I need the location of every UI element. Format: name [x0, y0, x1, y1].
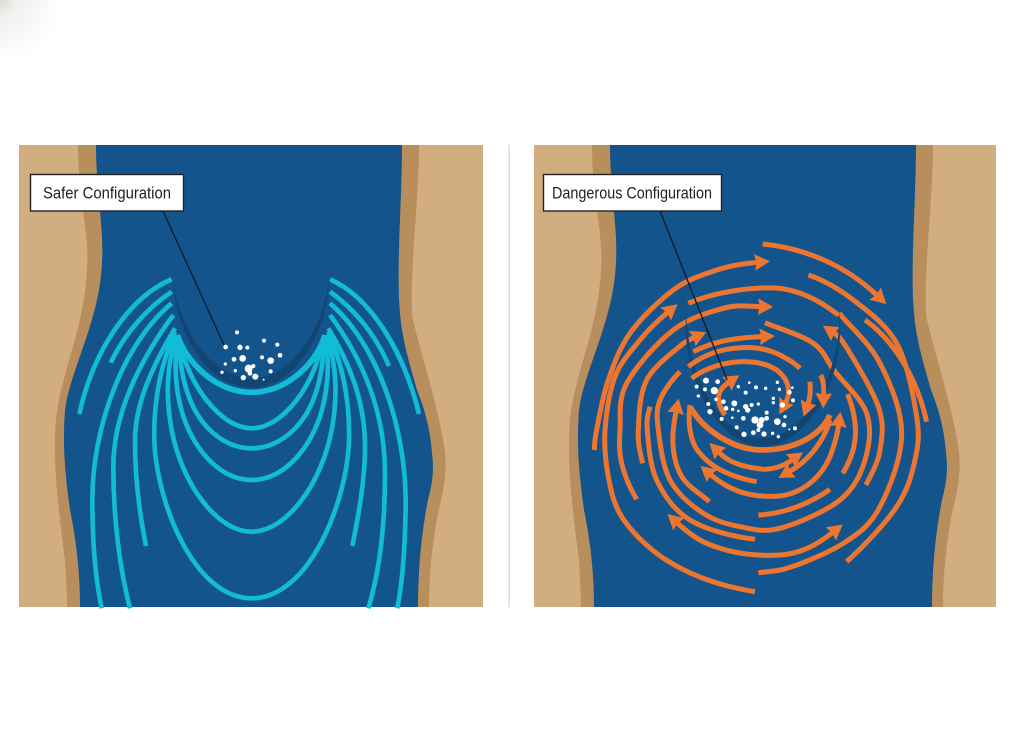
panel: safer configuration — [19, 145, 483, 608]
sediment wall — [19, 145, 483, 607]
water channel — [578, 145, 947, 607]
panel: dangerous configuration — [534, 145, 996, 607]
label: dangerous configuration: Dangerous Configuration — [552, 184, 712, 202]
divider — [508, 145, 510, 607]
label: dangerous configuration — [544, 174, 722, 211]
label: safer configuration — [30, 174, 184, 211]
water channel — [64, 145, 433, 607]
leader line — [163, 211, 224, 345]
cyan flow lines — [79, 279, 419, 608]
leader line — [660, 211, 727, 380]
sediment particles — [220, 330, 282, 381]
cup scour crescent — [686, 310, 840, 447]
orange turbulent flow arrows — [594, 244, 927, 592]
cup scour crescent — [173, 273, 329, 388]
sediment particles — [695, 378, 797, 438]
inner scour arrows — [688, 337, 824, 415]
background smudge — [0, 0, 70, 70]
sediment wall — [534, 145, 996, 607]
wall shoulder — [55, 145, 446, 607]
label: safer configuration: Safer Configuration — [43, 184, 171, 202]
wall shoulder — [569, 145, 960, 607]
